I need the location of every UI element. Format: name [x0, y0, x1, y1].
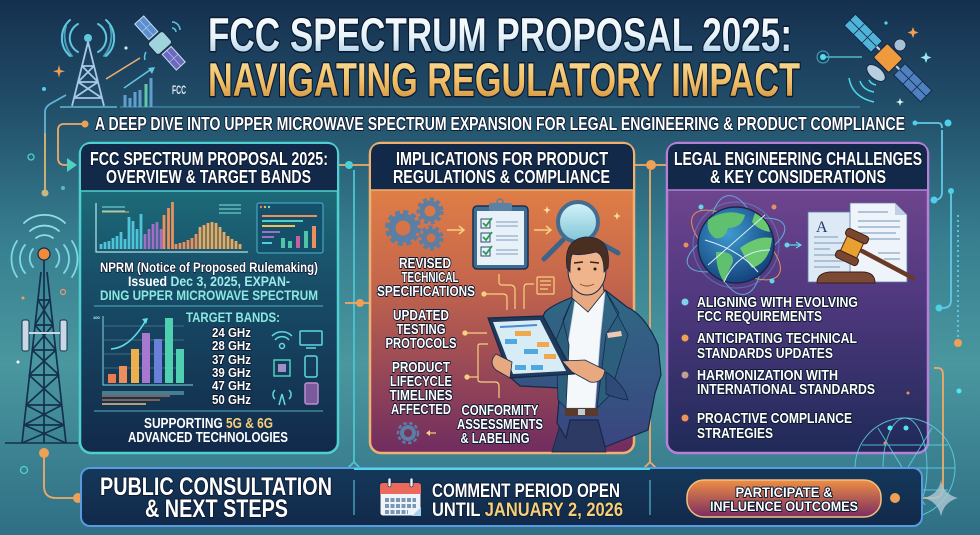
bar chart: growth: 100 [93, 315, 100, 320]
device icons [272, 331, 322, 405]
panel: legal engineering [667, 143, 928, 453]
NPRM text block [100, 260, 318, 303]
supporting technologies text: SUPPORTING 5G & 6G [144, 416, 273, 432]
list: considerations: FCC REQUIREMENTS [697, 308, 822, 325]
implications labels: TECHNICAL [402, 269, 458, 286]
implications labels: PRODUCT [392, 359, 450, 376]
icon: documents and gavel: A [816, 219, 828, 236]
panel 1 heading: FCC SPECTRUM PROPOSAL 2025: [90, 149, 328, 169]
bottom heading [100, 473, 332, 523]
icon: small radio tower [60, 20, 117, 107]
panel: public consultation [81, 468, 922, 526]
connector arrows [429, 274, 554, 433]
NPRM text block: NPRM (Notice of Proposed Rulemaking) [100, 260, 318, 275]
icon: small gear [398, 423, 430, 443]
list: considerations: ALIGNING WITH EVOLVING [697, 294, 858, 311]
implications labels: & LABELING [460, 430, 530, 447]
implications labels: ASSESSMENTS [457, 416, 543, 433]
icon: sparkle star [924, 480, 958, 516]
dashboard thumbnail [257, 203, 323, 253]
icon: sparkline with arrow [106, 58, 155, 107]
panel 1 heading [80, 144, 338, 191]
button: participate: INFLUENCE OUTCOMES [710, 498, 858, 514]
implications labels: PROTOCOLS [386, 335, 456, 352]
panel 3 heading [667, 144, 928, 190]
list: considerations: HARMONIZATION WITH [697, 367, 838, 384]
list: considerations [682, 294, 875, 442]
target bands list: 24 GHz [212, 325, 251, 340]
icon: large cell tower [5, 215, 78, 443]
implications labels: TESTING [396, 321, 446, 338]
icon: small satellite [124, 13, 188, 73]
implications labels: TIMELINES [390, 387, 452, 404]
implications labels: REVISED [399, 255, 451, 272]
supporting technologies text: ADVANCED TECHNOLOGIES [128, 430, 288, 446]
implications labels: CONFORMITY [462, 402, 538, 419]
title [208, 8, 800, 106]
illustration: presenter with tablet [488, 237, 661, 452]
comment period text [432, 481, 623, 521]
connector lines [16, 87, 962, 503]
target bands list: TARGET BANDS: [186, 309, 280, 325]
bar chart: growth [93, 315, 193, 404]
implications labels: LIFECYCLE [390, 373, 452, 390]
panel 2 heading: IMPLICATIONS FOR PRODUCT [396, 149, 608, 169]
button: participate [687, 480, 881, 517]
icon: FCC mark: FCC [172, 83, 186, 97]
target bands list: 37 GHz [212, 352, 251, 367]
bottom heading: PUBLIC CONSULTATION [100, 473, 332, 501]
icon: large satellite right [817, 13, 933, 106]
implications labels [377, 255, 543, 447]
NPRM text block: Issued Dec 3, 2025, EXPAN- [128, 274, 290, 289]
target bands list: 39 GHz [212, 365, 251, 380]
panel 2 heading [370, 144, 634, 190]
connector dot [890, 493, 900, 503]
icon: gears [387, 199, 442, 249]
implications labels: UPDATED [393, 307, 449, 324]
NPRM text block: DING UPPER MICROWAVE SPECTRUM [100, 287, 318, 303]
title: FCC SPECTRUM PROPOSAL 2025: [208, 8, 792, 61]
icon: clipboard checklist [473, 199, 528, 269]
panel 2 heading: REGULATIONS & COMPLIANCE [393, 167, 610, 187]
list: considerations: INTERNATIONAL STANDARDS [697, 381, 875, 398]
list: considerations: STRATEGIES [697, 425, 773, 442]
target bands list: 50 GHz [212, 392, 251, 407]
panel 1 heading: OVERVIEW & TARGET BANDS [106, 167, 311, 187]
button: participate: PARTICIPATE & [736, 484, 832, 500]
bar chart: spectrum activity [96, 202, 248, 252]
implications labels: AFFECTED [391, 401, 451, 418]
comment period text: UNTIL JANUARY 2, 2026 [432, 500, 623, 521]
icon: calendar [380, 478, 421, 516]
icon: magnifier [543, 202, 621, 259]
panel: implications [370, 143, 661, 453]
icon: documents and gavel [808, 203, 913, 283]
icon: globe [680, 192, 801, 298]
panel: overview and target bands [80, 143, 338, 453]
target bands list: 47 GHz [212, 378, 251, 393]
supporting technologies text [128, 416, 288, 446]
list: considerations: PROACTIVE COMPLIANCE [697, 410, 852, 427]
implications labels: SPECIFICATIONS [377, 283, 475, 300]
target bands list: 28 GHz [212, 338, 251, 353]
arrows: process [447, 226, 551, 234]
list: considerations: STANDARDS UPDATES [697, 345, 833, 362]
icon: sparkle left [53, 65, 65, 78]
target bands list [186, 309, 280, 407]
panel 3 heading: & KEY CONSIDERATIONS [710, 167, 886, 187]
bottom heading: & NEXT STEPS [145, 495, 288, 523]
icon: network globe [855, 388, 962, 518]
comment period text: COMMENT PERIOD OPEN [432, 481, 620, 502]
list: considerations: ANTICIPATING TECHNICAL [697, 330, 857, 347]
